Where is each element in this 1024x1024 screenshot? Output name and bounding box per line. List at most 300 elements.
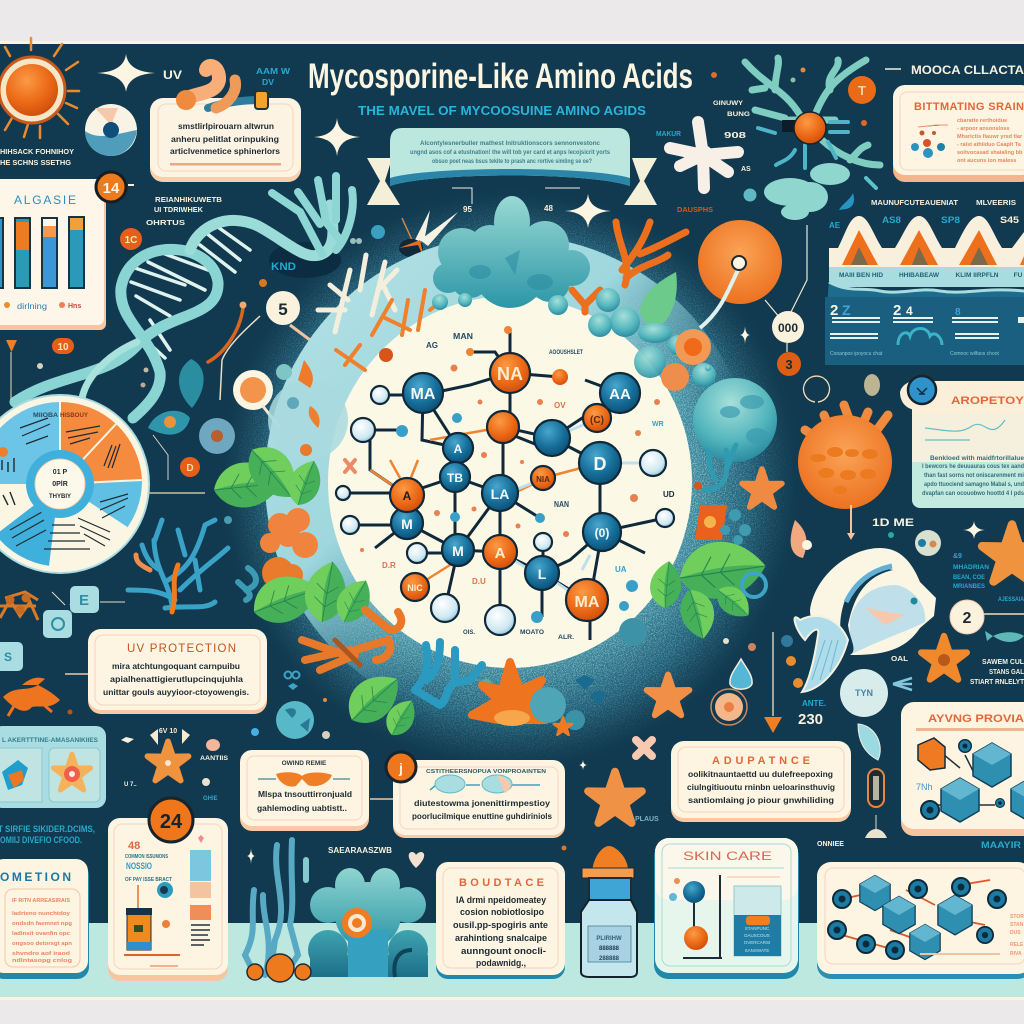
atom labels: M [401, 516, 413, 532]
label: KND: KND [271, 261, 296, 273]
panel: mountain manufacturing chart: FU [1014, 272, 1023, 279]
notes near white starfish: BUNG [727, 111, 750, 118]
notes by starfish: SAWEM CUL [982, 659, 1024, 666]
icon: bottle: 288888 [599, 956, 620, 962]
panel: property card [900, 376, 1024, 508]
panel: UV PROTECTION: apialhenattigierutlupcinqujuhla [110, 675, 244, 684]
badge: j [386, 752, 416, 782]
panel: mountain manufacturing chart: AE [829, 221, 841, 230]
atom labels: (0) [595, 526, 609, 540]
panel: BOUDTACE: IA drmi npeidomeatey [456, 895, 546, 905]
icon: small starfish [742, 469, 782, 507]
badge: 14: 14 [103, 180, 120, 197]
atom labels: A [403, 489, 412, 503]
notes beside bars: OHRTUS [146, 220, 185, 227]
panel: mountain manufacturing chart: KLIM IIRPFLN [956, 272, 999, 279]
badge: 2 with connector [950, 600, 1024, 634]
badge: 5: 5 [278, 300, 288, 319]
small blue dots [350, 225, 385, 244]
icon: eye bubble [888, 530, 941, 556]
small labels beside star: GHIE [203, 796, 218, 802]
subtitle: THE MAVEL OF MYCOOSUINE AMINO AGIDS [358, 104, 646, 118]
panel: BITTMATING SRAIN: soitvocasad shaialing bb [957, 150, 1023, 156]
pie chart: THYBIY [49, 494, 71, 500]
panel: SKIN CARE: DAUSCOUS [744, 933, 770, 938]
badge: 000: 000 [778, 321, 798, 335]
icon: bubble with fish [268, 360, 348, 460]
molecule bonds [343, 330, 665, 640]
badge: 14 [96, 172, 134, 202]
atom labels: NIC [407, 583, 423, 593]
connector from pie [148, 492, 205, 494]
icon: teal tile S [70, 586, 125, 613]
sparkle [97, 54, 155, 92]
panel: purple lens card [393, 760, 565, 838]
panel: owind sunglasses card: Mlspa tnsouttirronjuald [258, 790, 352, 799]
icon: mosquito [399, 210, 458, 258]
icon: teal leaf [179, 359, 204, 408]
icon: small sparkle [579, 760, 587, 770]
panel: property card: AROPETOY [951, 395, 1024, 407]
panel: OMETION: ndlntasopg cnlog [12, 958, 72, 964]
panel: ADUPATNCE: ADUPATNCE [712, 755, 810, 767]
panel: ALGASIE bar chart [0, 179, 106, 330]
panel: intro text card: articlvenmetice sphinerlors [170, 147, 281, 156]
panel: owind sunglasses card [240, 750, 369, 831]
icon: teal shell [148, 411, 190, 480]
dot [562, 846, 566, 850]
notes near white starfish: GINUWY [713, 100, 744, 107]
icon: orange starfish [921, 636, 967, 679]
notes beside bars: REIANHIKUWETB [155, 197, 222, 204]
badge: 1C: 1C [125, 235, 137, 246]
molecule annotations: AOOUSHSLET [549, 350, 583, 356]
atom labels: D [594, 454, 606, 474]
panel: ALGASIE bar chart: ALGASIE [14, 193, 76, 207]
small labels beside star: 6V 10 [159, 728, 177, 735]
connector with 95 label: 48 [544, 204, 553, 213]
atom labels [401, 364, 631, 611]
notes above OMETION [0, 824, 95, 845]
dark stats: 4 [906, 304, 913, 318]
icon: pebble and leaf cluster [432, 272, 716, 391]
notes near starfish: MRIANBES [953, 583, 986, 590]
scattered dots [360, 348, 702, 552]
label: ANTE 230: ANTE. [802, 699, 826, 708]
caption under sun: HE SCHNS SSETHG [0, 158, 71, 167]
connector [65, 673, 88, 675]
badge: 10: 10 [57, 342, 69, 353]
panel: mountain manufacturing chart: Cooanpos ipoyocu chat [830, 351, 883, 357]
molecule annotations: D.U [472, 577, 486, 586]
atom labels: MA [411, 386, 436, 403]
orange x mark [345, 460, 355, 472]
panel: BOUDTACE: aunngount onocli- [461, 946, 546, 956]
notes above OMETION: T SIRFIE SIKIDER.DCIMS, [0, 824, 95, 834]
notes near white starfish: DAUSPHS [677, 207, 713, 214]
notes near white starfish: AS [741, 166, 751, 173]
molecule annotations: OV [554, 401, 566, 410]
icon: reef pebbles bottom right [530, 618, 647, 735]
label: PLAUS: PLAUS [635, 816, 659, 823]
caption under sun [0, 147, 74, 167]
pie chart: MIIOBA [33, 413, 59, 419]
icon: bubble with text: TYN [855, 688, 873, 698]
molecule annotations: OIS. [463, 629, 475, 636]
badge: 3 [777, 352, 801, 376]
labels: ONNIEE and MAAYIR [817, 840, 1022, 850]
notes beside bars: UI TDRIWHEK [154, 207, 203, 214]
panel: intro text card: smstlirlpirouarn altwrun [178, 122, 274, 131]
icon: teal coral seat [308, 868, 428, 977]
badge: 000 [765, 225, 807, 352]
panel: owind sunglasses card: OWIND REMIE [282, 760, 327, 767]
icon: bottle: 888888 [599, 946, 620, 952]
label: ANTE 230 [798, 699, 826, 728]
molecule annotations: MAN [453, 332, 473, 341]
icon: eye disc [85, 104, 137, 156]
sparkle [565, 194, 611, 228]
panel: UV PROTECTION [88, 629, 267, 714]
panel: OMETION: ladinsit ovanfin opc [12, 931, 70, 937]
molecule diagram [336, 326, 702, 641]
badge: 5 [266, 291, 310, 340]
panel: AYVNG PROVIA hex diagram: 7Nh [916, 782, 933, 792]
notes near white starfish: 908 [724, 131, 747, 140]
badge: j: j [398, 760, 403, 776]
panel: BOUDTACE: cosion nobiotlosipo [460, 907, 544, 917]
panel: ALGASIE bar chart: Hns [68, 303, 81, 310]
icon: heart [409, 852, 424, 868]
label: AAM W: DV [262, 77, 274, 87]
notes near starfish [953, 553, 1024, 603]
pie chart: HISBOUY [60, 413, 88, 419]
label: 1D ME: 1D ME [872, 517, 914, 529]
icon: water drop [730, 659, 752, 689]
icon: orange coral bottom [472, 662, 545, 726]
notes near starfish: BEAN, COE [953, 574, 986, 581]
arrow: down [764, 632, 782, 733]
notes near white starfish [656, 100, 751, 214]
bar chart [0, 217, 84, 288]
panel: SKIN CARE: SKIN CARE [683, 849, 772, 863]
sparkle [247, 848, 255, 864]
panel: pathway diagram: RELE [1010, 942, 1024, 948]
small labels beside star: U 7.. [124, 782, 137, 788]
small labels beside star [121, 728, 228, 802]
panel: BITTMATING SRAIN [893, 85, 1024, 182]
panel: BITTMATING SRAIN: ont aucuns ion maless [957, 158, 1016, 164]
panel: UV PROTECTION: unittar gouls auyyioor-ctoyowengis. [103, 688, 249, 697]
banner: intro ribbon: Alcontylesnerbuller mathest lnitruktionscors sennonvestonc [420, 140, 600, 147]
banner: intro ribbon: ungnd asos cof a etustnation! the will tob yer card et anps lecojsicrit yorts [410, 149, 610, 156]
panel: teal comparison [0, 726, 106, 808]
central blob ring [265, 235, 755, 725]
panel: OMETION [0, 859, 89, 979]
icon: branching blue coral [128, 520, 228, 612]
label: AAM W: AAM W [256, 66, 291, 76]
icon: DNA helix and branching coral [15, 176, 353, 418]
icon: orange sponge ball [798, 405, 892, 540]
connector with 95 label: 95 [463, 205, 472, 214]
labels: ONNIEE and MAAYIR: MAAYIR [981, 840, 1022, 850]
atom labels: TB [447, 471, 463, 485]
arrow: fish direction [893, 678, 912, 690]
label: ANTE 230: 230 [798, 711, 823, 728]
panel: pathway diagram: DUS [1010, 930, 1021, 936]
small labels beside star: AANTIIS [200, 756, 228, 762]
panel: SKIN CARE: SANSWATE [745, 948, 769, 953]
panel: 24 worksheet: COMMON ISSUMONS [125, 854, 169, 860]
notes near starfish: &9 [953, 553, 962, 560]
small dots [37, 363, 148, 388]
icon: bubble with text [840, 669, 888, 717]
panel: mountain manufacturing chart: Comnoc wilfaos choot [950, 351, 1000, 357]
icon: big starfish [982, 524, 1024, 582]
icon: teal tile S: E [79, 592, 89, 609]
icon: green leaves lower left [246, 558, 378, 631]
panel: intro text card: anheru pelitlat orinpuking [171, 135, 279, 144]
icon: coral neuron [745, 58, 880, 168]
small decorative bubbles [723, 573, 803, 688]
icon: orange sponge cross [260, 508, 318, 589]
panel: UV PROTECTION: UV PROTECTION [127, 643, 236, 655]
badge: D: D [186, 463, 194, 474]
icon: teal small coral [238, 568, 256, 600]
badge: 24: 24 [160, 811, 183, 833]
notes by starfish [970, 659, 1024, 686]
icon: seagrass [245, 840, 306, 975]
icon: teal dome [693, 378, 777, 462]
panel: BITTMATING SRAIN: - ralst athiiduo Caaplt Ta [957, 142, 1022, 148]
panel: purple lens card: poorlucilmique enuttine guhdiriniols [412, 812, 553, 821]
icon: teal coral right [704, 445, 736, 490]
molecule annotations: UD [663, 490, 675, 499]
connector with 95 label [452, 188, 580, 214]
panel: ADUPATNCE: santiomlaing jo piour gnwhiliding [688, 796, 834, 805]
icon: blue coral and leaves bottom [337, 642, 492, 741]
icon: orange seaweed [336, 290, 442, 370]
pie chart: 0PlR [52, 481, 68, 488]
atom labels: L [538, 566, 547, 582]
dark stats: 2 [830, 302, 838, 319]
grain around glow [225, 195, 795, 765]
banner: intro ribbon [367, 128, 657, 205]
dark stats: Z [842, 302, 851, 318]
icon: bottle [581, 846, 637, 977]
molecule annotations: UA [615, 565, 627, 574]
badge: T: T [858, 83, 866, 98]
panel: pathway diagram: STAN [1010, 922, 1024, 928]
panel: BITTMATING SRAIN: cbaratte rerthoidue [957, 118, 1007, 124]
molecule annotations: AG [426, 341, 438, 350]
panel: ADUPATNCE [671, 741, 851, 822]
molecule annotations: WR [652, 421, 664, 428]
icon: orange reef [302, 610, 401, 670]
panel: mountain manufacturing chart: HHIBABEAW [899, 272, 940, 279]
icon: teal tile O [43, 592, 74, 638]
panel: BITTMATING SRAIN: BITTMATING SRAIN [914, 101, 1024, 113]
panel: purple lens card: CSTITHEERSNOPUA VONPROAINTEN [426, 769, 547, 775]
icon: brown molecule cluster [0, 592, 38, 620]
icon: green leaves top left [211, 436, 327, 511]
icon: teal tile small: S [4, 650, 12, 664]
panel: purple lens card: diutestowma jonenittirmpestioy [414, 799, 551, 808]
badge: 1C [120, 228, 142, 250]
label: UV: UV [163, 68, 182, 82]
panel: SKIN CARE: OVERCARSI [744, 940, 770, 945]
icon: orange ball and tube [698, 220, 782, 328]
banner: intro ribbon: obsuo poet neas bsus tekite to prash anc rortive simling se oe? [432, 158, 592, 165]
molecule annotations: ALR. [558, 634, 574, 641]
icon: sea critter [791, 520, 812, 558]
pie chart: 01 P [53, 469, 68, 476]
atom labels: NIA [536, 475, 550, 484]
label: OAL: OAL [891, 656, 909, 663]
panel: mountain manufacturing chart: SP8 [941, 215, 960, 225]
panel: pathway diagram: RIVA [1010, 951, 1022, 957]
icon: orange star [647, 674, 689, 715]
icon: sun disc [711, 689, 747, 725]
icon: starfish [588, 772, 642, 823]
notes near starfish: MHADRIAN [953, 564, 989, 571]
panel: mountain manufacturing chart [825, 200, 1024, 365]
icon: orange coral [572, 222, 686, 312]
panel: owind sunglasses card: gahlemoding uabtistt.. [257, 804, 347, 813]
panel: ADUPATNCE: ciulngitiuoutu rninbn ueloarinsthuvig [687, 783, 835, 792]
icon: small bubbles near planet [284, 672, 327, 702]
atom labels: (C) [590, 415, 604, 426]
panel: BITTMATING SRAIN: Mhsrictis fiauwr yrsd tlar [957, 134, 1023, 140]
dark stats: 2 [893, 302, 901, 319]
icon: white coral [318, 255, 397, 332]
notes beside bars [146, 197, 222, 227]
dots top right [711, 68, 867, 202]
icon: right leaves [648, 536, 769, 643]
panel: 24 worksheet: NOSSIO [126, 861, 152, 871]
badge: 3: 3 [785, 357, 793, 372]
atom labels: MA [575, 594, 600, 611]
circular arrow [804, 376, 830, 402]
icon: bubble creature [199, 418, 235, 454]
panel: 24 worksheet: 48 [128, 840, 140, 852]
molecule annotations [382, 332, 675, 641]
panel: mountain manufacturing chart: AS8 [882, 215, 901, 225]
icon: teal tile small [0, 642, 23, 671]
panel: BOUDTACE: ousil.pp-spogiris ante [453, 920, 548, 930]
sparkle [314, 118, 360, 156]
panel: OMETION: ladrteno nunchtdoy [12, 911, 71, 917]
central glow [210, 180, 810, 780]
icon: teal coral crown [433, 196, 590, 308]
panel: OMETION: OMETION [0, 870, 71, 884]
pie chart [0, 395, 149, 573]
badge: T [848, 76, 876, 104]
molecule annotations: D.R [382, 561, 396, 570]
icon: sun [0, 38, 79, 138]
atom labels: AA [609, 386, 631, 403]
molecule annotations: MOATO [520, 629, 544, 636]
panel: UV PROTECTION: mira atchtungoquant carnpuibu [112, 662, 240, 671]
dark stats [830, 302, 961, 319]
atom labels: NA [497, 364, 523, 384]
icon: small fish [985, 631, 1024, 642]
panel: mountain manufacturing chart: S45 [1000, 215, 1019, 225]
sparkle [963, 521, 985, 539]
panel: OMETION: ongsoo detorsgt apn [12, 941, 73, 947]
icon: arc connector [865, 815, 887, 838]
badge: D [180, 457, 200, 477]
panel: BOUDTACE: arahintiong snalcaipe [455, 933, 547, 943]
panel: ALGASIE bar chart: dirlning [17, 302, 47, 311]
panel: BOUDTACE: BOUDTACE [459, 877, 544, 889]
panel: 24 worksheet: OF PAY ISSE BRACT [125, 877, 172, 883]
icon: bottle: PLIRIHW [596, 936, 622, 942]
panel: BITTMATING SRAIN: - arpoor ansonsloss [957, 126, 1010, 132]
icon: large fish [795, 548, 936, 692]
panel: mountain manufacturing chart: MAIII BEN HID [839, 272, 883, 279]
panel: BOUDTACE: podawnidg., [476, 958, 526, 968]
panel: mountain manufacturing chart: MLVEERIS [976, 200, 1016, 207]
molecule atoms [336, 353, 674, 635]
badge: 2 with connector: 2 [963, 610, 972, 627]
icon: white starfish [670, 122, 738, 188]
label: MOOCA CLLACTA: MOOCA CLLACTA [911, 63, 1024, 77]
teal label strip [829, 267, 1024, 287]
cream molecule disc [328, 296, 692, 668]
icon: cloud blobs [764, 163, 876, 220]
icon: orange polyp base [247, 954, 311, 982]
orange connector [208, 279, 267, 362]
panel: pathway diagram [817, 862, 1024, 979]
panel: BOUDTACE [436, 862, 565, 979]
caption under sun: HIHSACK FOHNIHOY [0, 147, 74, 156]
atom labels: LA [491, 486, 509, 502]
labels: ONNIEE and MAAYIR: ONNIEE [817, 841, 844, 848]
sparkle [740, 326, 750, 344]
peaks [829, 216, 1024, 268]
icon: orange tube [176, 66, 268, 110]
notes above OMETION: OMIIJ DIVEFIO CFOOD. [0, 835, 82, 845]
icon: teal planet [251, 701, 330, 739]
panel: 24 worksheet [108, 818, 228, 981]
icon: orange polyp [695, 505, 751, 545]
label: SAEARAASZWB: SAEARAASZWB [328, 846, 392, 855]
badge: 10 [52, 338, 74, 354]
label: AAM W [256, 66, 291, 87]
panel: AYVNG PROVIA hex diagram: AYVNG PROVIA [928, 713, 1024, 725]
panel: OMETION: IF RITN ARREASIRAIS [12, 898, 70, 904]
panel: ADUPATNCE: oolikitnauntaettd uu dulefreepoxing [688, 770, 833, 779]
small pod [864, 374, 880, 396]
panel: intro text card [150, 98, 301, 182]
icon: orange crab [3, 678, 72, 716]
dark stats: 8 [955, 307, 961, 318]
panel: property card: Benkloed with maidfrtorillalue [930, 456, 1024, 462]
atom labels: A [495, 545, 506, 562]
atom labels: A [454, 442, 463, 456]
icon: capsule [868, 769, 884, 807]
title: Mycosporine-Like Amino Acids [308, 57, 693, 96]
icon: pink cross [636, 740, 652, 756]
panel: mountain manufacturing chart: MAUNUFCUTEAUENIAT [871, 200, 959, 207]
panel: teal comparison: L AKERTTTINE-AMASANIKIIES [2, 738, 98, 744]
bottom edge highlight [0, 997, 1024, 1000]
callout bubble [220, 316, 280, 428]
icon: teal dot [224, 516, 232, 524]
notes near white starfish: MAKUR [656, 131, 681, 138]
panel: OMETION: ondsdn faemnet npg [12, 921, 72, 927]
